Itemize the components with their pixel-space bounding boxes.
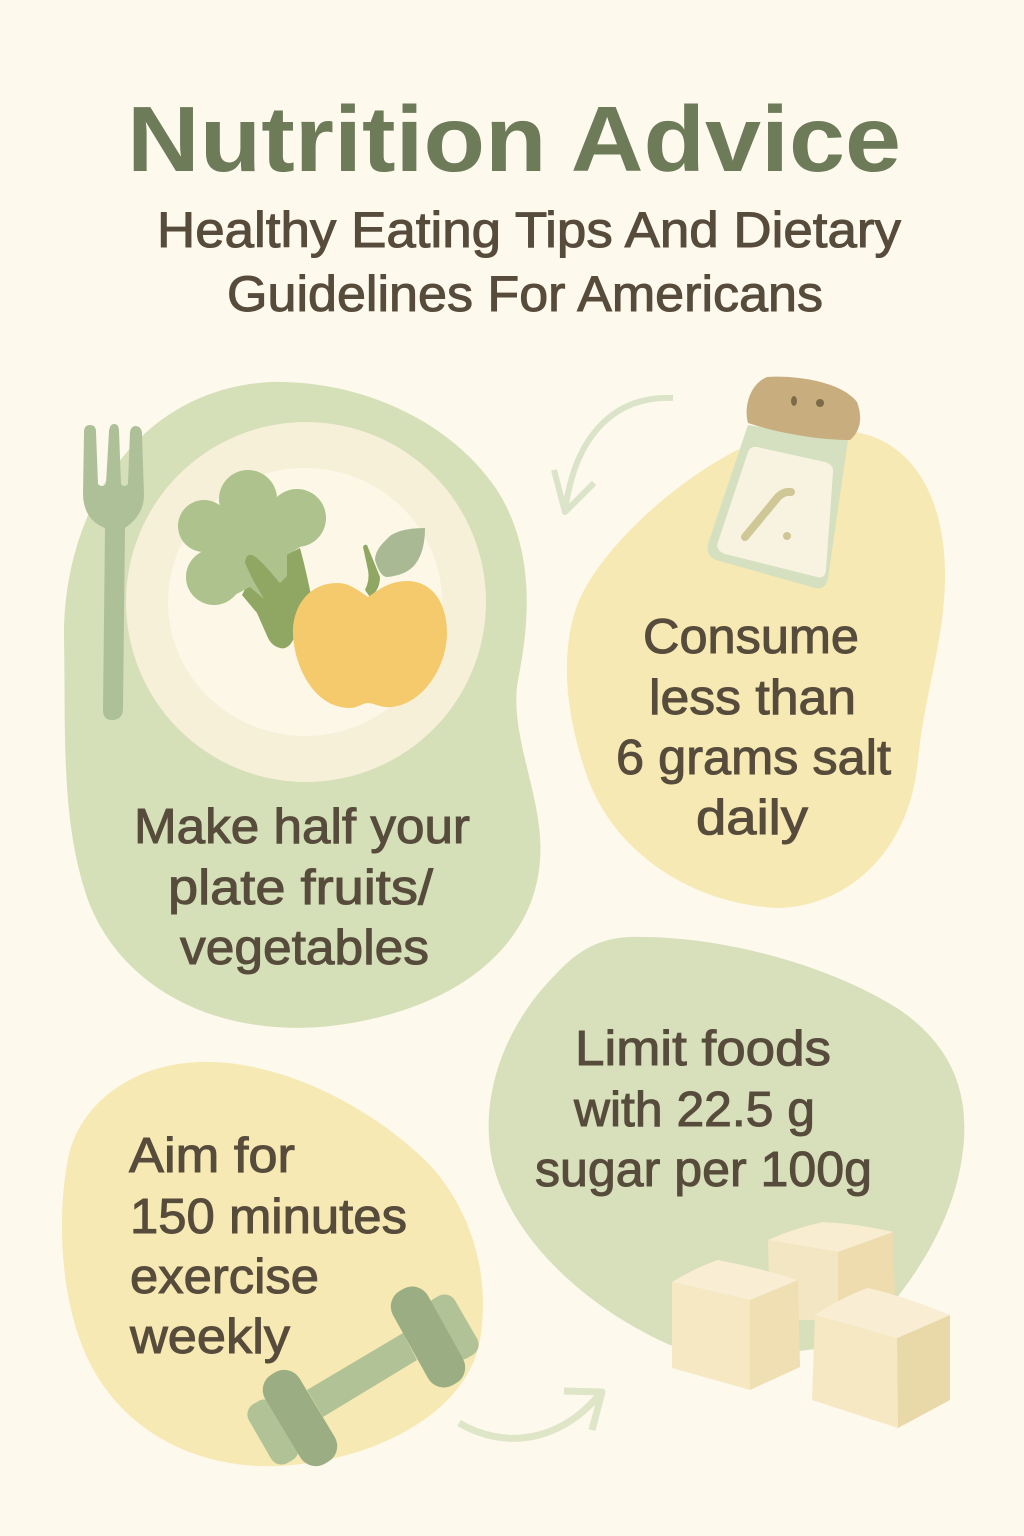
- icon: fork: [83, 424, 144, 720]
- panel: plate advice: [64, 382, 540, 1028]
- yellow blob: [62, 1062, 483, 1466]
- text: sugar advice: sugar per 100g: [535, 1143, 872, 1197]
- cube left: [672, 1260, 800, 1390]
- title: Nutrition Advice: [127, 87, 901, 191]
- subtitle: Healthy Eating Tips And Dietary: [157, 202, 901, 258]
- text: exercise advice: 150 minutes: [130, 1190, 407, 1244]
- icon: apple: [293, 528, 447, 708]
- cube right: [812, 1288, 950, 1428]
- icon: salt shaker: [708, 377, 860, 588]
- text: plate advice: vegetables: [180, 921, 429, 975]
- panel: exercise advice: [62, 1062, 602, 1473]
- panel: sugar advice: [489, 937, 964, 1428]
- text: plate advice: Make half your: [134, 800, 470, 854]
- subtitle: [157, 202, 901, 322]
- green blob: [64, 382, 540, 1028]
- text: exercise advice: weekly: [129, 1310, 291, 1364]
- text: salt advice: less than: [649, 671, 856, 725]
- text: exercise advice: Aim for: [129, 1129, 295, 1183]
- green blob: [489, 937, 964, 1353]
- text: plate advice: plate fruits/: [168, 861, 433, 915]
- text: plate advice: [134, 800, 470, 975]
- icon: sugar cubes: [672, 1222, 950, 1428]
- text: salt advice: 6 grams salt: [616, 731, 891, 785]
- text: exercise advice: exercise: [130, 1250, 319, 1304]
- arrow: curved to sugar: [459, 1391, 602, 1438]
- text: salt advice: daily: [696, 791, 809, 845]
- text: sugar advice: [535, 1022, 872, 1197]
- panel: salt advice: [554, 377, 945, 908]
- subtitle: Guidelines For Americans: [227, 266, 823, 322]
- text: sugar advice: Limit foods: [575, 1022, 831, 1076]
- text: salt advice: [616, 610, 891, 845]
- text: sugar advice: with 22.5 g: [573, 1083, 815, 1137]
- icon: dumbbell: [243, 1280, 483, 1473]
- arrow: curved to plate: [554, 398, 673, 512]
- yellow blob: [567, 429, 945, 908]
- icon: broccoli: [178, 470, 326, 648]
- cube back: [768, 1222, 895, 1320]
- text: exercise advice: [129, 1129, 407, 1364]
- text: salt advice: Consume: [643, 610, 859, 664]
- plate: [126, 422, 486, 782]
